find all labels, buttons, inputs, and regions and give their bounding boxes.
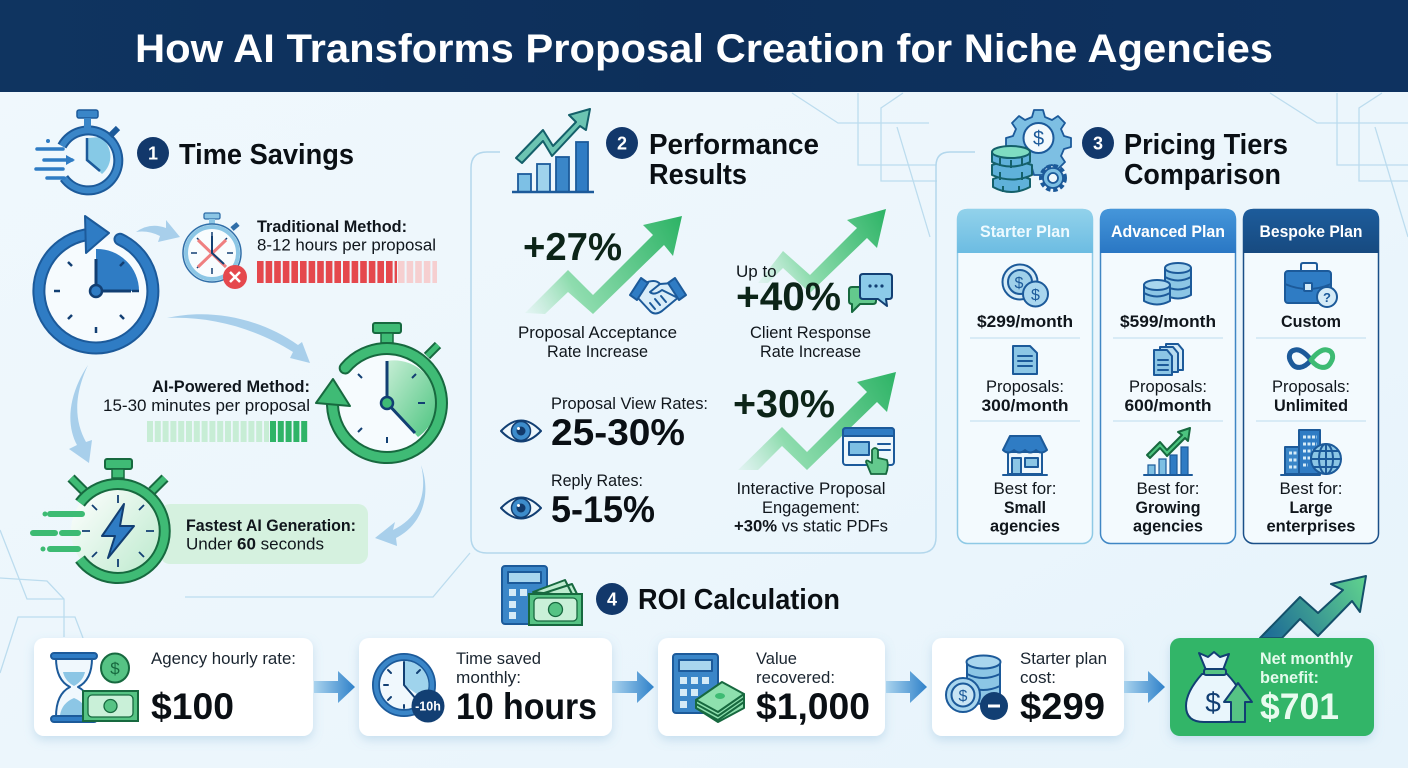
panel: performance results — [501, 109, 896, 536]
text: interactive engagement label — [734, 479, 888, 536]
text: traditional method: 8-12 hours per proposal — [257, 236, 436, 254]
progress bar: traditional — [257, 261, 437, 283]
icon: coins minus — [946, 656, 1008, 720]
icon: money bag: $ — [1205, 687, 1221, 718]
icon: calculator and cash stack — [673, 654, 744, 722]
icon: storefront — [1003, 436, 1047, 475]
callout: fastest AI generation — [160, 504, 368, 564]
icon: infinity — [1289, 350, 1333, 367]
text: traditional method: Traditional Method: — [257, 217, 407, 236]
icon: coin stacks — [1144, 263, 1191, 304]
panel: time savings — [33, 110, 441, 578]
icon: lightning stopwatch — [33, 459, 165, 578]
icon: document — [1013, 346, 1037, 374]
card: advanced plan: Growing — [1136, 498, 1200, 517]
arrow: clock to fastest — [69, 365, 92, 463]
badge: number 1: 1 — [148, 144, 158, 164]
heading: pricing tiers comparison: Pricing Tiers — [1124, 129, 1288, 161]
card: starter plan: agencies — [990, 516, 1060, 536]
card: value recovered — [658, 638, 885, 736]
card: value recovered: Value — [756, 650, 797, 668]
arrow: acceptance growth — [525, 216, 682, 314]
card: starter plan — [957, 209, 1093, 544]
icon: gears and coins: $ — [1033, 128, 1044, 150]
callout: fastest AI generation: Fastest AI Generation: — [186, 516, 356, 535]
arrow: response growth — [758, 209, 886, 293]
card: time saved: 10 hours — [456, 686, 597, 727]
card: starter plan cost: cost: — [1020, 669, 1056, 687]
card: bespoke plan: Best for: — [1280, 479, 1342, 498]
icon: coins — [1002, 264, 1048, 306]
card: advanced plan: agencies — [1133, 516, 1203, 536]
heading: pricing tiers comparison — [1124, 129, 1288, 191]
card: bespoke plan: Bespoke Plan — [1260, 223, 1362, 241]
icon: traditional stopwatch with X — [183, 213, 247, 289]
card: time saved — [359, 638, 612, 736]
stat: reply rates — [551, 471, 655, 530]
icon: multiple documents — [1154, 344, 1183, 375]
card: bespoke plan: Large — [1290, 498, 1332, 517]
arrow: clock to traditional — [136, 220, 180, 242]
card: advanced plan: $599/month — [1120, 313, 1216, 331]
card: net monthly benefit — [1170, 638, 1374, 736]
icon: eye — [501, 420, 541, 442]
card: value recovered: $1,000 — [756, 686, 870, 727]
card: agency hourly rate: $100 — [151, 686, 234, 727]
icon: briefcase: ? — [1323, 290, 1331, 305]
arrow: step 4 to 5 — [1124, 671, 1165, 703]
stat: proposal view rates: Proposal View Rates: — [551, 394, 708, 413]
panel: pricing tiers — [957, 110, 1379, 544]
icon: hourglass and money: $ — [110, 659, 120, 678]
card: advanced plan: Best for: — [1136, 479, 1200, 498]
card: value recovered: recovered: — [756, 669, 835, 687]
card: starter plan cost — [932, 638, 1124, 736]
card: bespoke plan: Unlimited — [1274, 396, 1348, 415]
badge: number 2: 2 — [617, 134, 627, 154]
callout: fastest AI generation: Under 60 seconds — [186, 534, 324, 554]
text: response label: Client Response — [750, 323, 871, 342]
stat: up to +40%: Up to — [736, 262, 777, 281]
stat: reply rates: 5-15% — [551, 489, 655, 530]
icon: chat bubbles — [849, 274, 892, 312]
card: advanced plan — [1100, 209, 1236, 544]
text: acceptance label — [518, 323, 677, 361]
stat: proposal view rates — [551, 394, 708, 453]
card: time saved: Time saved — [456, 650, 541, 668]
card: net monthly benefit: $701 — [1260, 686, 1339, 727]
icon: hourglass and money — [51, 653, 138, 722]
icon: coins: $ — [1015, 275, 1024, 292]
card: starter plan cost: $299 — [1020, 686, 1105, 727]
text: response label: Rate Increase — [760, 342, 861, 361]
icon: interactive browser — [843, 428, 894, 474]
header banner: How AI Transforms Proposal Creation for Niche Agencies — [135, 27, 1273, 71]
card: net monthly benefit: benefit: — [1260, 669, 1319, 687]
icon: briefcase — [1285, 263, 1337, 307]
card: bespoke plan — [1243, 209, 1379, 544]
text: AI-powered method — [103, 377, 310, 415]
icon: large clock with arrow — [39, 216, 153, 348]
arrow: AI-powered to fastest — [375, 465, 425, 546]
icon: eye — [501, 498, 541, 518]
arrow: engagement growth — [738, 372, 896, 470]
card: advanced plan: Advanced Plan — [1111, 223, 1225, 241]
card: time saved: monthly: — [456, 669, 521, 687]
card: advanced plan: Proposals: — [1129, 377, 1207, 396]
arrow: net benefit growth — [1260, 576, 1366, 638]
heading: performance results: Results — [649, 159, 747, 191]
icon: gears and coins — [992, 110, 1071, 192]
card: agency hourly rate: Agency hourly rate: — [151, 650, 296, 668]
icon: calculator and cash — [502, 566, 582, 625]
card: starter plan: Starter Plan — [980, 223, 1070, 241]
stat: up to +40%: +40% — [736, 275, 841, 319]
progress bar: AI-powered — [147, 421, 309, 442]
badge: number 3 — [1082, 127, 1114, 159]
text: AI-powered method: 15-30 minutes per proposal — [103, 396, 310, 415]
badge: number 4 — [596, 583, 628, 615]
card: starter plan: Best for: — [994, 479, 1056, 498]
stat: +30%: +30% — [733, 383, 835, 426]
badge: number 4: 4 — [607, 590, 617, 610]
text: AI-powered method: AI-Powered Method: — [152, 377, 310, 396]
icon: growth bars — [1144, 428, 1192, 475]
card: bespoke plan: Proposals: — [1272, 377, 1350, 396]
icon: clock minus 10h — [376, 657, 444, 722]
card: starter plan cost: Starter plan — [1020, 650, 1107, 668]
icon: handshake — [630, 278, 686, 314]
text: interactive engagement label: Interactive Proposal — [736, 479, 886, 498]
badge: number 3: 3 — [1093, 134, 1103, 154]
arrow: clock to AI-powered — [167, 314, 310, 363]
text: interactive engagement label: Engagement: — [762, 498, 860, 517]
heading: time savings: Time Savings — [179, 139, 354, 171]
text: acceptance label: Rate Increase — [547, 342, 648, 361]
arrow: step 2 to 3 — [612, 671, 654, 703]
stat: proposal view rates: 25-30% — [551, 412, 685, 453]
arrow: step 3 to 4 — [886, 671, 927, 703]
header banner — [0, 0, 1408, 92]
icon: AI stopwatch — [316, 323, 441, 458]
text: traditional method — [257, 217, 436, 254]
icon: header stopwatch — [36, 110, 118, 190]
icon: clock minus 10h: -10h — [415, 700, 441, 714]
stat: +27%: +27% — [523, 226, 622, 269]
heading: performance results — [649, 129, 819, 191]
card: bespoke plan: enterprises — [1266, 516, 1356, 536]
heading: ROI calculation: ROI Calculation — [638, 584, 840, 616]
text: response label — [750, 323, 871, 361]
card: net monthly benefit: Net monthly — [1260, 650, 1354, 668]
stat: reply rates: Reply Rates: — [551, 471, 643, 490]
badge: number 2 — [606, 127, 638, 159]
card: starter plan: Small — [1004, 498, 1046, 517]
card: starter plan: $299/month — [977, 313, 1073, 331]
icon: buildings and globe — [1281, 430, 1341, 475]
panel: ROI calculation — [34, 566, 1374, 736]
card: starter plan: Proposals: — [986, 377, 1064, 396]
icon: coins: $ — [1031, 287, 1040, 304]
card: starter plan: 300/month — [982, 396, 1068, 415]
card: agency hourly rate — [34, 638, 313, 736]
card: bespoke plan: Custom — [1281, 313, 1341, 331]
heading: performance results: Performance — [649, 129, 819, 161]
text: acceptance label: Proposal Acceptance — [518, 323, 677, 342]
text: interactive engagement label: +30% vs static PDFs — [734, 516, 888, 536]
icon: growth chart — [512, 109, 594, 192]
heading: pricing tiers comparison: Comparison — [1124, 159, 1281, 191]
arrow: step 1 to 2 — [314, 671, 355, 703]
icon: coins minus: $ — [959, 688, 968, 705]
badge: number 1 — [137, 137, 169, 169]
icon: money bag — [1186, 652, 1252, 722]
card: advanced plan: 600/month — [1124, 396, 1212, 415]
